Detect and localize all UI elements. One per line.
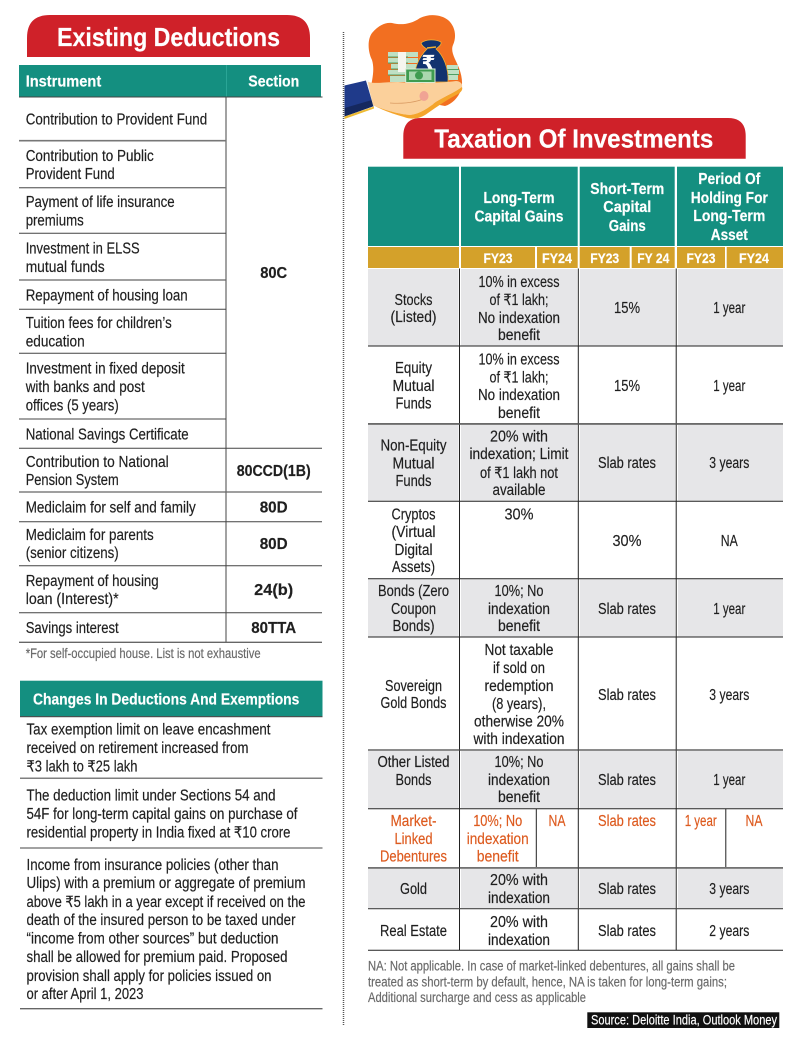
panel: taxation of investments [368, 118, 783, 1028]
deductions table grid [19, 97, 322, 642]
row: stocks: Stocks [394, 292, 433, 309]
deductions footnote: *For self-occupied house. List is not exhaustive [26, 646, 261, 661]
instrument column: Mediclaim for parents [26, 527, 154, 544]
row: market-linked debentures: 1 year [685, 813, 717, 830]
taxation footnote: Additional surcharge and cess as applicable [368, 990, 586, 1005]
row: sovereign gold bonds: if sold on [493, 660, 545, 677]
change: insurance policies: above ₹5 lakh in a year except if received on the [26, 894, 306, 911]
row: other listed bonds: indexation [488, 772, 550, 789]
row: stocks [390, 274, 745, 344]
taxation table grid [368, 268, 783, 950]
change: capital gains limit: residential property in India fixed at ₹10 crore [26, 824, 290, 841]
row: equity mutual funds: of ₹1 lakh; [490, 369, 548, 386]
row: zero coupon bonds: Coupon [391, 601, 436, 618]
row: sovereign gold bonds: Not taxable [484, 642, 554, 659]
change: capital gains limit [26, 787, 298, 841]
row: equity mutual funds: 10% in excess [478, 351, 560, 368]
row: stocks: 15% [614, 300, 640, 317]
row: sovereign gold bonds: with indexation [473, 731, 564, 748]
row: non-equity mutual funds [380, 428, 749, 499]
deductions table header: Instrument [26, 74, 101, 91]
instrument column: Repayment of housing loan [26, 287, 188, 304]
row: cryptos: 30% [612, 533, 642, 550]
taxation table teal header: Gains [609, 218, 646, 235]
instrument column: loan (Interest)* [26, 591, 119, 608]
row: other listed bonds: Bonds [396, 772, 432, 789]
row: market-linked debentures: Linked [394, 831, 432, 848]
change: insurance policies: “income from other sources” but deduction [26, 930, 278, 947]
row: stocks: 10% in excess [478, 274, 560, 291]
instrument column: Repayment of housing [26, 573, 159, 590]
row: real estate: 2 years [709, 923, 749, 940]
row: non-equity mutual funds: 3 years [709, 455, 749, 472]
section column: 24(b) [254, 582, 293, 599]
section column: 80CCD(1B) [237, 463, 311, 480]
row: other listed bonds: Other Listed [378, 754, 450, 771]
row: sovereign gold bonds: Gold Bonds [380, 695, 447, 712]
row: sovereign gold bonds: (8 years), [492, 696, 546, 713]
taxation table gold FY row: FY23 [484, 250, 513, 266]
section column: 80D [260, 536, 288, 553]
taxation table teal header: Long-Term [693, 208, 765, 225]
instrument column: Contribution to Provident Fund [26, 111, 207, 128]
instrument column: (senior citizens) [26, 545, 119, 562]
row: gold [400, 872, 749, 907]
row: non-equity mutual funds: available [492, 482, 546, 499]
instrument column: Tuition fees for children’s [26, 315, 172, 332]
row: cryptos: Assets) [392, 559, 435, 576]
changes heading [20, 681, 322, 717]
row: sovereign gold bonds [380, 642, 749, 748]
row: market-linked debentures [380, 813, 763, 865]
row: sovereign gold bonds: otherwise 20% [474, 713, 564, 730]
row: gold: 3 years [709, 881, 749, 898]
row: non-equity mutual funds: indexation; Limit [470, 446, 569, 463]
taxation table teal header: Long-Term [484, 190, 554, 207]
instrument column [25, 111, 207, 637]
change: insurance policies [26, 857, 306, 1003]
row: cryptos: NA [721, 533, 738, 550]
row: market-linked debentures: Debentures [380, 848, 447, 865]
row: non-equity mutual funds: 20% with [490, 428, 548, 445]
row: market-linked debentures: benefit [477, 848, 519, 865]
instrument column: with banks and post [25, 379, 145, 396]
row: cryptos: 30% [504, 506, 534, 523]
change: leave encashment: ₹3 lakh to ₹25 lakh [26, 758, 138, 775]
row: equity mutual funds: benefit [498, 405, 541, 422]
change: insurance policies: or after April 1, 2023 [26, 986, 144, 1003]
instrument column: Provident Fund [26, 166, 115, 183]
taxation table teal header: Period Of [698, 171, 761, 188]
row: gold: Slab rates [598, 881, 656, 898]
row: zero coupon bonds: benefit [498, 618, 541, 635]
row: cryptos: (Virtual [392, 524, 436, 541]
row: zero coupon bonds: Bonds (Zero [378, 583, 449, 600]
row: zero coupon bonds: Slab rates [598, 601, 656, 618]
icon: hand holding money bag and cash: ₹ [422, 52, 435, 74]
row: equity mutual funds: Mutual [392, 378, 434, 395]
row: gold: indexation [488, 890, 550, 907]
change: insurance policies: Income from insurance policies (other than [26, 857, 278, 874]
row: market-linked debentures: NA [548, 813, 566, 830]
row: market-linked debentures: Slab rates [598, 813, 656, 830]
row: other listed bonds: 10%; No [494, 754, 544, 771]
row: gold: Gold [400, 881, 427, 898]
row: equity mutual funds: 1 year [713, 378, 745, 395]
row: sovereign gold bonds: redemption [484, 678, 554, 695]
section column: 80TTA [251, 620, 296, 637]
change: leave encashment: Tax exemption limit on leave encashment [26, 721, 271, 738]
row: equity mutual funds: Funds [396, 395, 432, 412]
instrument column: Pension System [26, 472, 119, 489]
row: cryptos: Cryptos [392, 506, 436, 523]
row: real estate: indexation [488, 932, 550, 949]
row: equity mutual funds: No indexation [478, 387, 560, 404]
instrument column: premiums [26, 212, 84, 229]
section column [237, 265, 311, 637]
taxation table gold FY row: FY 24 [637, 250, 669, 266]
heading: Taxation Of Investments [403, 118, 746, 159]
section column: 80C [260, 265, 287, 282]
row: market-linked debentures: indexation [467, 831, 529, 848]
taxation table teal header: Capital [603, 199, 651, 216]
instrument column: Investment in fixed deposit [26, 360, 185, 377]
row: stocks: benefit [498, 327, 541, 344]
section column: 80D [260, 499, 288, 516]
instrument column: Savings interest [26, 620, 119, 637]
instrument column: Investment in ELSS [26, 240, 140, 257]
taxation table gold FY row: FY24 [542, 250, 572, 266]
row: other listed bonds: Slab rates [598, 772, 656, 789]
taxation footnote [368, 958, 735, 1005]
row: non-equity mutual funds: Funds [396, 473, 432, 490]
taxation table gold FY row: FY23 [686, 250, 716, 266]
heading: Taxation Of Investments: Taxation Of Investments [434, 124, 713, 154]
row: zero coupon bonds [378, 583, 745, 635]
row: gold: 20% with [490, 872, 548, 889]
taxation table teal header: Short-Term [590, 181, 664, 198]
change: capital gains limit: 54F for long-term capital gains on purchase of [26, 806, 298, 823]
row: stocks: 1 year [713, 300, 745, 317]
row: equity mutual funds: 15% [614, 378, 640, 395]
instrument column: mutual funds [26, 259, 105, 276]
taxation table teal header: Asset [711, 227, 748, 244]
row: stocks: (Listed) [390, 309, 436, 326]
grey row bands [368, 269, 783, 908]
change: capital gains limit: The deduction limit under Sections 54 and [26, 787, 276, 804]
change: insurance policies: Ulips) with a premium or aggregate of premium [26, 875, 306, 892]
taxation table teal header: Capital Gains [474, 208, 564, 225]
row: zero coupon bonds: 1 year [713, 601, 745, 618]
row: real estate: 20% with [490, 914, 548, 931]
row: sovereign gold bonds: 3 years [709, 687, 749, 704]
taxation table gold FY row: FY23 [590, 250, 619, 266]
row: zero coupon bonds: Bonds) [392, 618, 434, 635]
row: other listed bonds: benefit [498, 789, 541, 806]
row: non-equity mutual funds: Non-Equity [380, 437, 447, 454]
row: non-equity mutual funds: Mutual [392, 455, 434, 472]
deductions table header [19, 65, 322, 98]
row: market-linked debentures: Market- [390, 813, 436, 830]
row: non-equity mutual funds: Slab rates [598, 455, 656, 472]
row: stocks: of ₹1 lakh; [490, 292, 548, 309]
row: equity mutual funds: Equity [395, 360, 432, 377]
row: stocks: No indexation [478, 310, 560, 327]
instrument column: Contribution to National [26, 454, 169, 471]
taxation table teal header [368, 167, 783, 246]
taxation footnote: treated as short-term by default, hence, NA is taken for long-term gains; [368, 974, 727, 989]
row: market-linked debentures: NA [746, 813, 763, 830]
taxation footnote: NA: Not applicable. In case of market-linked debentures, all gains shall be [368, 958, 735, 973]
row: real estate [380, 914, 749, 949]
row: real estate: Slab rates [598, 923, 656, 940]
instrument column: Mediclaim for self and family [26, 499, 196, 516]
instrument column: Payment of life insurance [26, 194, 175, 211]
panel: changes in deductions and exemptions [20, 681, 322, 1009]
row: cryptos: Digital [394, 542, 432, 559]
heading: Existing Deductions: Existing Deductions [57, 22, 280, 52]
row: real estate: Real Estate [380, 923, 447, 940]
instrument column: Contribution to Public [26, 148, 154, 165]
change: insurance policies: death of the insured person to be taxed under [26, 912, 296, 929]
instrument column: National Savings Certificate [26, 426, 189, 443]
changes heading: Changes In Deductions And Exemptions [33, 691, 299, 708]
change: insurance policies: shall be allowed for premium paid. Proposed [26, 949, 288, 966]
row: equity mutual funds [392, 351, 745, 422]
row: zero coupon bonds: indexation [488, 601, 550, 618]
taxation table gold FY row [368, 247, 783, 268]
instrument column: offices (5 years) [26, 397, 119, 414]
row: cryptos [392, 506, 738, 576]
row: sovereign gold bonds: Sovereign [385, 678, 442, 695]
deductions table header: Section [248, 74, 299, 91]
row: market-linked debentures: 10%; No [473, 813, 522, 830]
row: sovereign gold bonds: Slab rates [598, 687, 656, 704]
change: leave encashment: received on retirement increased from [26, 740, 248, 757]
row: zero coupon bonds: 10%; No [494, 583, 544, 600]
heading: Existing Deductions [27, 15, 310, 57]
row: other listed bonds: 1 year [713, 772, 745, 789]
instrument column: education [26, 333, 85, 350]
change: insurance policies: provision shall apply for policies issued on [26, 968, 272, 985]
row: other listed bonds [378, 754, 745, 806]
icon: hand holding money bag and cash [344, 15, 462, 119]
panel: existing deductions [19, 15, 322, 661]
change: leave encashment [26, 721, 271, 775]
row: non-equity mutual funds: of ₹1 lakh not [480, 465, 559, 482]
taxation table teal header: Holding For [691, 190, 768, 207]
taxation table gold FY row: FY24 [739, 250, 769, 266]
